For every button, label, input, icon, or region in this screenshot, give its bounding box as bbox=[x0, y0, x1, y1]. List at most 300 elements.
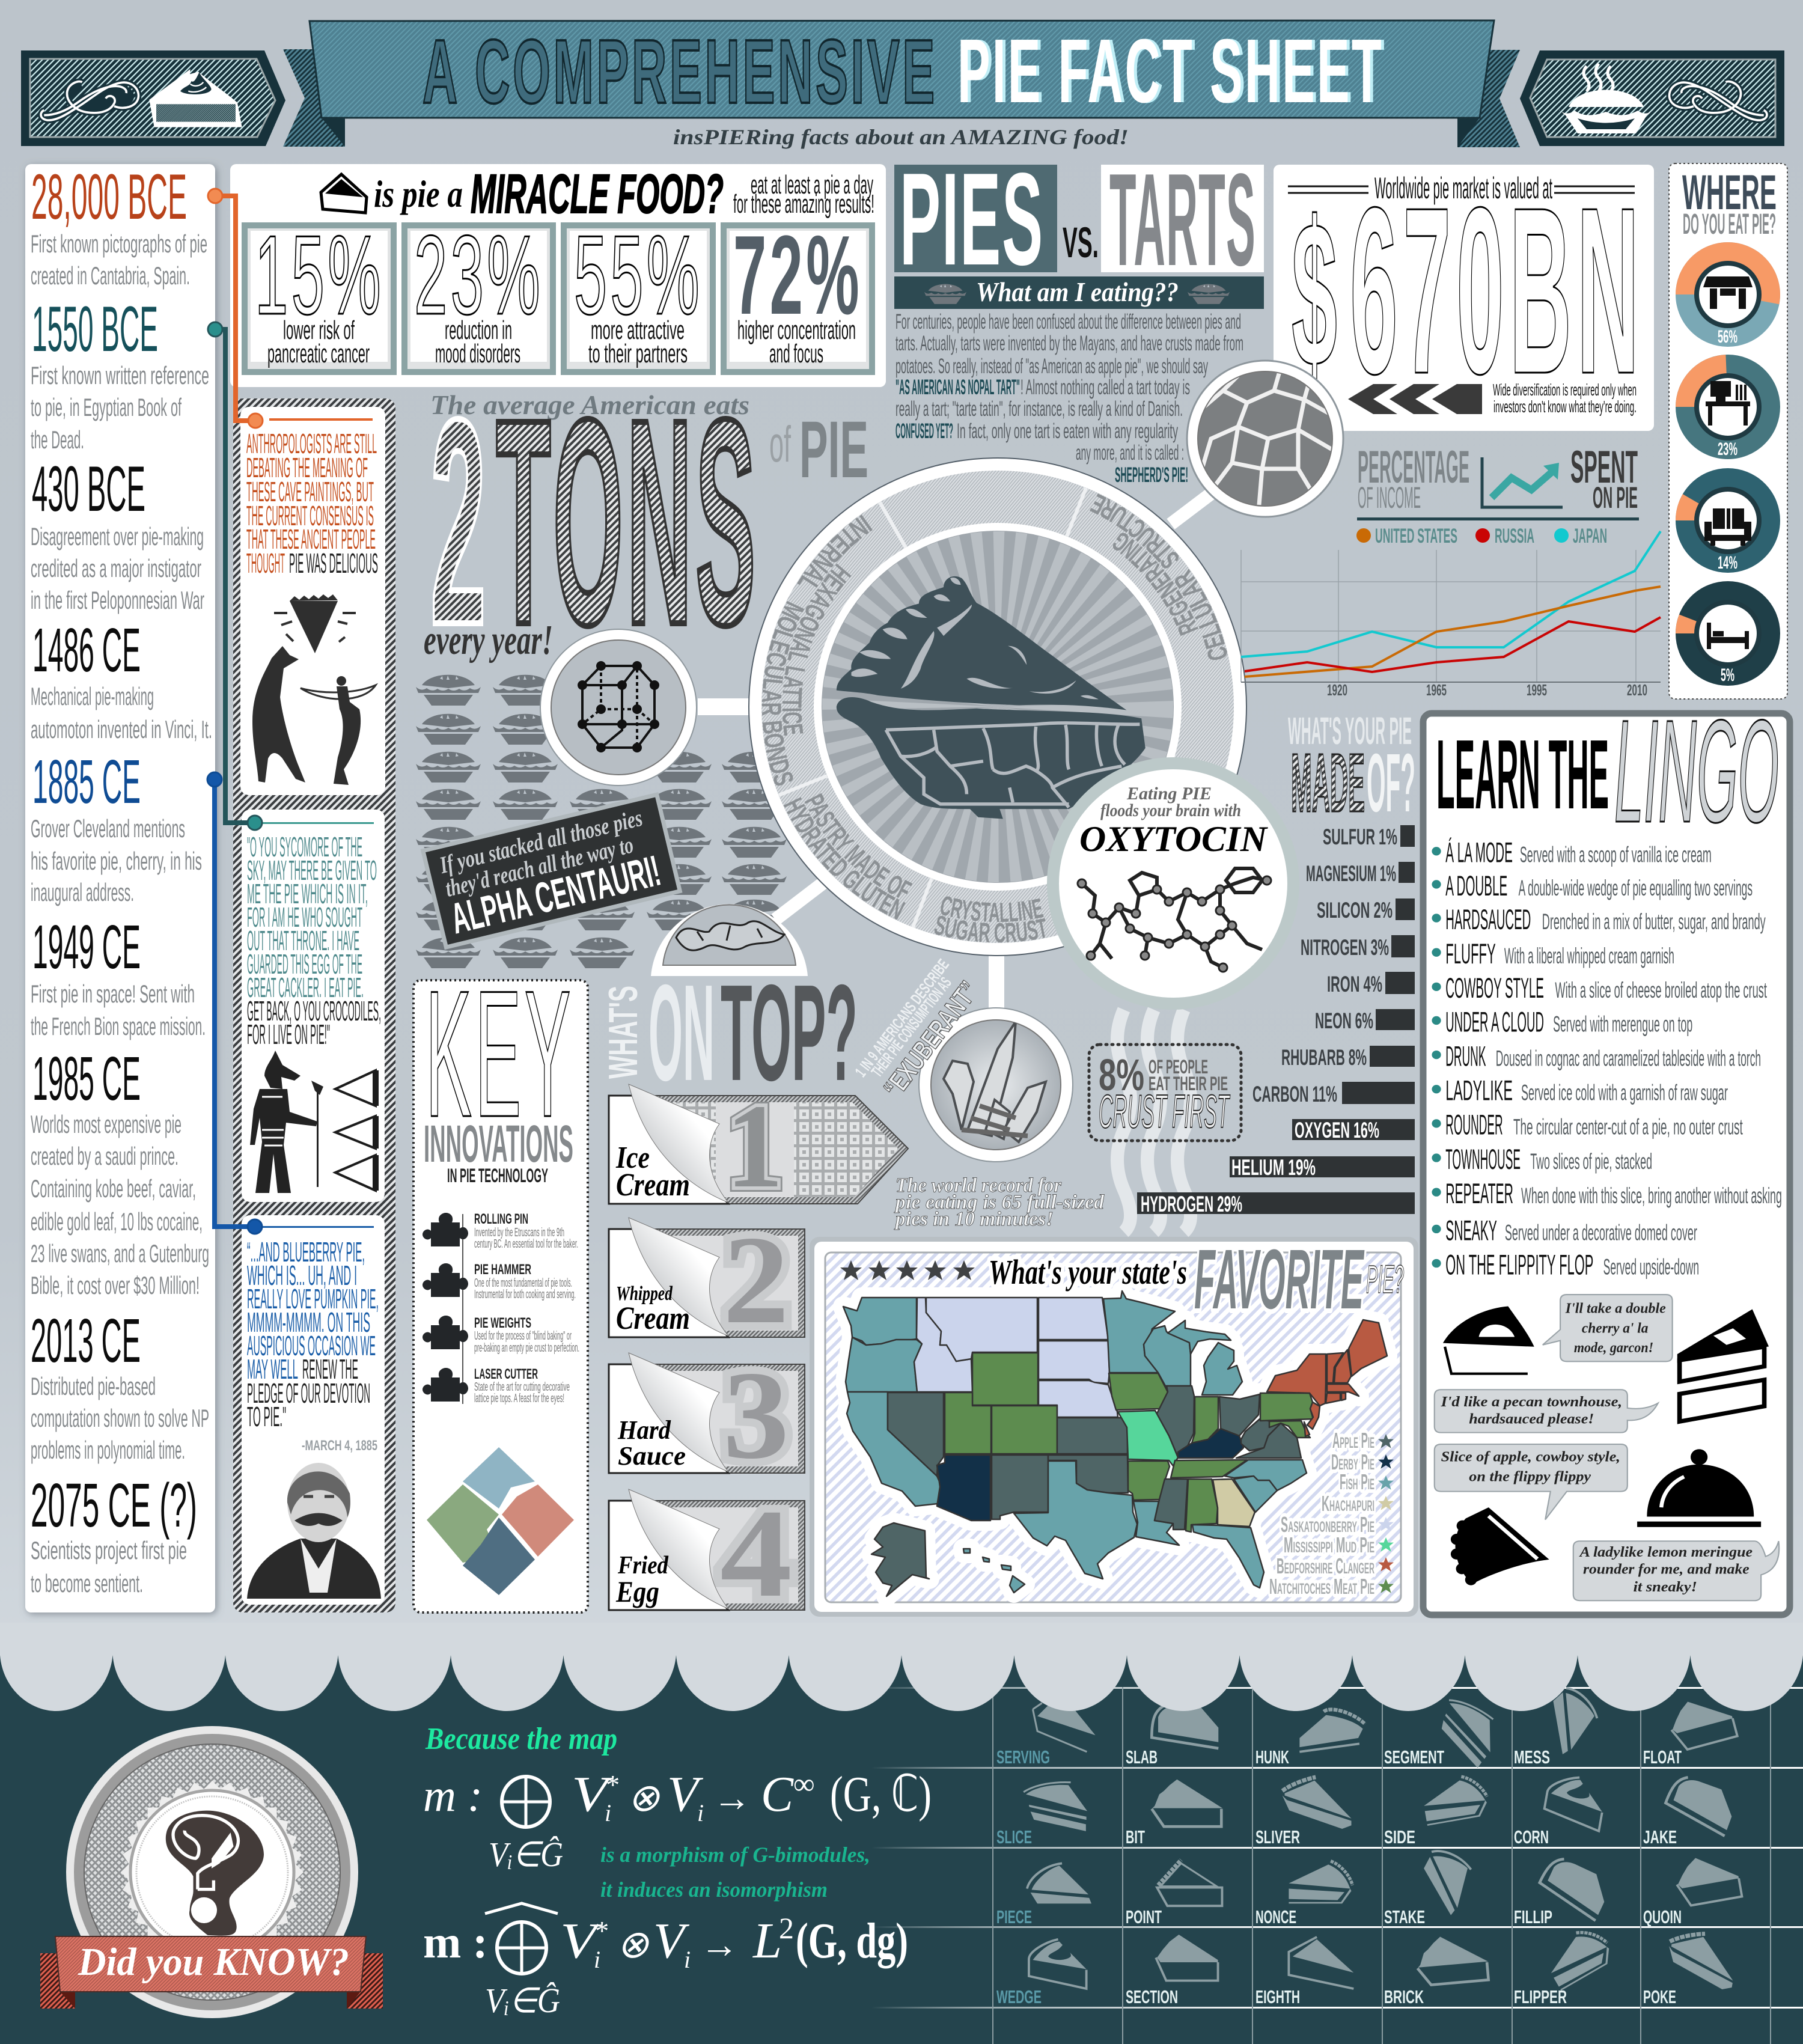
lingo glossary list: ROUNDER bbox=[1445, 1109, 1503, 1141]
text: CRUST FIRST bbox=[1099, 1085, 1230, 1138]
bar chart: pie composition: OXYGEN 16% bbox=[1295, 1118, 1379, 1143]
topping card 2: whipped cream bbox=[609, 1210, 805, 1350]
quote card: Grover Cleveland: MAY WELL bbox=[247, 1353, 298, 1385]
text block: pies vs tarts explanation: "AS AMERICAN AS NOPAL TART" bbox=[895, 376, 1020, 399]
slice labels: SEGMENT bbox=[1384, 1747, 1444, 1768]
line chart: spending over time: 2010 bbox=[1627, 681, 1647, 699]
callout: oxytocin: OXYTOCIN bbox=[1079, 819, 1269, 859]
speech bubble: lemon meringue: it sneaky! bbox=[1634, 1579, 1697, 1595]
formula line 1: V bbox=[667, 1766, 704, 1822]
ring text bbox=[762, 493, 1227, 942]
item: laser cutter: lattice pie tops. A feast for the eyes! bbox=[474, 1392, 564, 1405]
icon: pie slice bbox=[321, 174, 367, 213]
slice labels: FLIPPER bbox=[1514, 1986, 1567, 2007]
topping card 1: ice cream: 1 bbox=[726, 1080, 783, 1213]
speech bubble: pecan townhouse bbox=[1435, 1390, 1658, 1433]
slice labels: NONCE bbox=[1255, 1906, 1296, 1927]
text: TOP? bbox=[721, 957, 858, 1109]
math formula block: is a morphism of G-bimodules, bbox=[600, 1843, 870, 1867]
map legend: Saskatoonberry Pie bbox=[1281, 1512, 1374, 1537]
title: PIE FACT SHEET bbox=[960, 20, 1387, 121]
header: ribbon tails bbox=[283, 49, 1520, 147]
heading: what's your pie made of bbox=[1288, 709, 1415, 829]
timeline entry: 1985 CE: 1985 CE bbox=[32, 1044, 141, 1113]
text: ME THE PIE WHICH IS IN IT, bbox=[247, 878, 368, 909]
panel: key innovations: IN PIE TECHNOLOGY bbox=[447, 1165, 548, 1186]
timeline entry: 1949 CE: First pie in space! Sent with bbox=[31, 980, 195, 1008]
topping card 4: fried egg: 4 bbox=[720, 1484, 792, 1623]
text block: pies vs tarts explanation: In fact, only one tart is eaten with any regularity bbox=[957, 419, 1178, 443]
speech bubble: double cherry: mode, garcon! bbox=[1574, 1340, 1653, 1356]
topping card 1: ice cream: 1 bbox=[726, 1080, 783, 1213]
text: INNOVATIONS bbox=[424, 1115, 573, 1173]
formula line 2: Vᵢ∈Ĝ bbox=[485, 1981, 560, 2020]
timeline entry: 430 BCE: Disagreement over pie-making bbox=[31, 522, 204, 551]
map legend: Bedforshire Clanger bbox=[1277, 1554, 1374, 1578]
timeline entry: 430 BCE: credited as a major instigator bbox=[31, 554, 201, 582]
donut: table 56% bbox=[1686, 252, 1770, 347]
topping card 2: whipped cream: 2 bbox=[723, 1210, 789, 1350]
header: left badge with pie slice bbox=[21, 50, 285, 146]
formula line 1: ∞ bbox=[793, 1767, 815, 1801]
ribbon: did you know: Did you KNOW? bbox=[78, 1940, 349, 1984]
math formula block bbox=[423, 1722, 932, 2020]
text block: pies vs tarts explanation: SHEPHERD'S PIE! bbox=[1115, 463, 1188, 487]
timeline entry: 2013 CE: problems in polynomial time. bbox=[31, 1436, 185, 1464]
text: MMMM-MMMM. ON THIS bbox=[247, 1307, 370, 1338]
text: pre-baking an empty pie crust to perfection. bbox=[474, 1341, 579, 1355]
lingo glossary list: DRUNK bbox=[1445, 1041, 1486, 1072]
panel: favorite pie map bbox=[810, 1231, 1418, 1617]
formula line 2: V bbox=[560, 1913, 602, 1969]
text: TONS bbox=[496, 359, 759, 686]
banner: alpha centauri bbox=[423, 795, 680, 947]
donut: desk 23%: 23% bbox=[1718, 439, 1737, 459]
panel: miracle food: eat at least a pie a day bbox=[751, 170, 873, 200]
panel: timeline: 2075 CE (?) bbox=[31, 1471, 197, 1540]
bar chart: pie composition: MAGNESIUM 1% bbox=[1306, 861, 1396, 886]
magnifier: gluten half circle bbox=[651, 904, 808, 976]
formula line 2: * bbox=[594, 1915, 608, 1946]
banner: alpha centauri: ALPHA CENTAURI! bbox=[447, 847, 665, 943]
slice labels: BIT bbox=[1126, 1826, 1145, 1847]
text: THE CURRENT CONSENSUS IS bbox=[246, 500, 374, 531]
big number: 2 TONS bbox=[430, 359, 759, 686]
text block: pies vs tarts explanation bbox=[895, 310, 1243, 487]
formula line 1: i bbox=[697, 1799, 704, 1826]
stat: 72%: 72% bbox=[733, 212, 862, 338]
topping card 3: hard sauce: 3 bbox=[723, 1346, 789, 1485]
heading: what's on top: WHAT'S bbox=[600, 986, 646, 1079]
formula line 2: i bbox=[594, 1946, 600, 1973]
panel: favorite pie map: PIE? bbox=[1366, 1257, 1404, 1301]
panel: miracle food bbox=[230, 163, 886, 387]
lingo glossary list: Two slices of pie, stacked bbox=[1530, 1150, 1652, 1174]
formula line 1: C bbox=[761, 1766, 794, 1822]
item: pie weights: PIE WEIGHTS bbox=[474, 1315, 531, 1331]
formula line 1: → bbox=[713, 1777, 751, 1819]
donut: table 56%: 56% bbox=[1718, 327, 1737, 347]
item: laser cutter bbox=[423, 1366, 570, 1405]
icon: oxytocin molecule bbox=[1082, 868, 1267, 968]
text: For centuries, people have been confused about the difference between pies and bbox=[895, 310, 1241, 334]
bar chart: pie composition: SILICON 2% bbox=[1317, 898, 1393, 923]
timeline entry: 1550 BCE: to pie, in Egyptian Book of bbox=[31, 393, 182, 421]
icon: question mark bbox=[166, 1811, 264, 1936]
chart heading: percentage of income spent on pie: PERCENTAGE bbox=[1358, 442, 1469, 493]
caption: every year: every year! bbox=[424, 617, 553, 664]
lingo glossary list: ON THE FLIPPITY FLOP bbox=[1445, 1249, 1593, 1281]
speech bubble: double cherry bbox=[1543, 1295, 1673, 1361]
text: PIE WAS DELICIOUS bbox=[289, 548, 378, 579]
topping card 3: hard sauce: Hard bbox=[617, 1415, 671, 1445]
subtitle: insPIERing facts about an AMAZING food! bbox=[673, 125, 1129, 149]
map legend: Derby Pie bbox=[1331, 1450, 1374, 1474]
stat: 15%: lower risk of bbox=[283, 316, 355, 345]
slice labels: CORN bbox=[1514, 1826, 1549, 1847]
quote card: book of the dead: FOR I LIVE ON PIE!" bbox=[247, 1019, 330, 1050]
ring text: HYDRATED GLUTEN bbox=[784, 797, 906, 920]
text block: pies vs tarts explanation: CONFUSED YET? bbox=[895, 419, 953, 443]
panel: market value bbox=[1274, 157, 1654, 431]
timeline entry: 28,000 BCE bbox=[31, 160, 207, 290]
ring text: INTERNAL bbox=[797, 514, 873, 588]
footer: dark band bbox=[0, 1655, 1803, 2044]
map heading: What's your state's bbox=[989, 1252, 1187, 1292]
slice labels: FILLIP bbox=[1514, 1906, 1552, 1927]
formula line 1 bbox=[423, 1766, 932, 1874]
icon: cave painting of pie slice and figures bbox=[252, 594, 376, 785]
panel: key innovations: One of the most fundamental of pie tools. bbox=[474, 1277, 572, 1290]
stat: 72%: and focus bbox=[769, 339, 823, 368]
icon: stacked slices bbox=[1680, 1313, 1766, 1421]
footer: scalloped edge bbox=[0, 1623, 1803, 1711]
formula line 1: Vᵢ∈Ĝ bbox=[489, 1835, 563, 1874]
formula line 1: (G, ℂ) bbox=[830, 1766, 932, 1822]
slice labels: SERVING bbox=[996, 1747, 1050, 1768]
text block: pies vs tarts explanation: potatoes. So really, instead of "as American as apple pie", we should say bbox=[895, 355, 1208, 378]
text block: pies vs tarts explanation: ! Almost nothing called a tart today is bbox=[1020, 376, 1190, 399]
lingo glossary list: UNDER A CLOUD bbox=[1445, 1007, 1544, 1038]
slice labels: SLICE bbox=[996, 1826, 1032, 1847]
line chart: spending over time: 1965 bbox=[1426, 681, 1447, 699]
timeline entry: 1885 CE: his favorite pie, cherry, in his bbox=[31, 847, 202, 875]
bar chart: pie composition: NEON 6% bbox=[1315, 1008, 1373, 1033]
bar chart: pie composition: NITROGEN 3% bbox=[1301, 935, 1389, 960]
item: rolling pin: Invented by the Etruscans in the 9th bbox=[474, 1226, 564, 1239]
slice labels: SLAB bbox=[1126, 1747, 1158, 1768]
timeline entry: 28,000 BCE: First known pictographs of pie bbox=[31, 230, 207, 258]
timeline entry: 1486 CE bbox=[31, 615, 212, 743]
formula line 1: V bbox=[572, 1766, 614, 1822]
timeline entry: 1486 CE: automoton invented in Vinci, It. bbox=[31, 715, 212, 743]
text: REALLY LOVE PUMPKIN PIE, bbox=[247, 1283, 379, 1314]
item: rolling pin: ROLLING PIN bbox=[474, 1211, 528, 1227]
timeline entry: 1486 CE: 1486 CE bbox=[32, 615, 141, 685]
topping card 1: ice cream: Ice bbox=[615, 1141, 650, 1175]
ring text: CRYSTALLINE bbox=[941, 897, 1043, 922]
heading: is pie a miracle food: is pie a bbox=[374, 172, 463, 215]
text: OUT THAT THRONE. I HAVE bbox=[247, 925, 359, 956]
slice labels: SIDE bbox=[1384, 1826, 1415, 1847]
title: A COMPREHENSIVE bbox=[423, 20, 938, 122]
text block: pies vs tarts explanation: really a tart; "tarte tatin", for instance, is really a kind of Danish. bbox=[895, 397, 1183, 421]
stat: 55%: 55% bbox=[574, 212, 703, 338]
text: SKY, MAY THERE BE GIVEN TO bbox=[247, 855, 377, 886]
header: right badge with whole pie bbox=[1520, 50, 1784, 146]
panel: key innovations: State of the art for cutting decorative bbox=[474, 1380, 570, 1394]
callout: 8% crust first: 8% bbox=[1099, 1050, 1144, 1100]
timeline entry: 430 BCE: in the first Peloponnesian War bbox=[31, 586, 204, 614]
topping card 4: fried egg: 4 bbox=[720, 1484, 792, 1623]
quote card: Grover Cleveland: -MARCH 4, 1885 bbox=[302, 1438, 377, 1454]
map of United States bbox=[843, 1291, 1387, 1596]
quote card: Grover Cleveland: TO PIE." bbox=[247, 1401, 286, 1432]
formula line 1: i bbox=[605, 1799, 611, 1826]
math formula block: it induces an isomorphism bbox=[600, 1878, 828, 1902]
timeline entry: 28,000 BCE: 28,000 BCE bbox=[31, 160, 187, 233]
text: “...AND BLUEBERRY PIE, bbox=[247, 1236, 365, 1268]
stat: 55%: more attractive bbox=[591, 316, 685, 345]
callout: 8% crust first: EAT THEIR PIE bbox=[1149, 1073, 1228, 1094]
speech bubble: double cherry: cherry a' la bbox=[1582, 1320, 1649, 1336]
lingo glossary list: LADYLIKE bbox=[1445, 1075, 1513, 1106]
chart legend: RUSSIA bbox=[1495, 525, 1534, 548]
speech bubble: double cherry: I'll take a double bbox=[1565, 1300, 1666, 1316]
timeline entry: 28,000 BCE: created in Cantabria, Spain. bbox=[31, 261, 190, 290]
speech bubble: slice of apple: Slice of apple, cowboy style, bbox=[1441, 1448, 1620, 1465]
heading: pies vs tarts: VS. bbox=[1063, 219, 1099, 267]
slice icons bbox=[1024, 1684, 1742, 1991]
ring text: STRUCTURE bbox=[1090, 493, 1179, 569]
timeline entry: 1985 CE: edible gold leaf, 10 lbs cocaine, bbox=[31, 1207, 203, 1236]
item: pie weights bbox=[423, 1315, 579, 1355]
stat: 15% bbox=[245, 212, 394, 372]
quote card: anthropologists: THOUGHT bbox=[246, 548, 285, 579]
stat: 15%: 15% bbox=[255, 212, 384, 338]
text: TARTS bbox=[1109, 147, 1256, 293]
formula line 2: (G, dg) bbox=[796, 1913, 908, 1969]
donut: desk 23% bbox=[1686, 365, 1770, 459]
stat: 72%: higher concentration bbox=[737, 316, 856, 345]
slice labels: MESS bbox=[1514, 1747, 1550, 1768]
speech bubble: lemon meringue: rounder for me, and make bbox=[1583, 1561, 1750, 1577]
map legend: Khachapuri bbox=[1322, 1491, 1374, 1516]
chart legend: JAPAN bbox=[1573, 525, 1607, 548]
panel: key innovations: century BC. An essential tool for the baker. bbox=[474, 1237, 578, 1251]
text: DEBATING THE MEANING OF bbox=[246, 452, 368, 483]
map legend: Fish Pie bbox=[1340, 1469, 1374, 1494]
slice labels: JAKE bbox=[1643, 1826, 1677, 1847]
stat: 23%: mood disorders bbox=[435, 339, 520, 368]
bar chart: pie composition: CARBON 11% bbox=[1252, 1082, 1337, 1106]
timeline entry: 430 BCE: 430 BCE bbox=[32, 453, 145, 525]
slice labels: SLIVER bbox=[1255, 1826, 1300, 1847]
icon: pie a la mode bbox=[1443, 1306, 1534, 1374]
donut: sofa 14% bbox=[1686, 478, 1770, 573]
topping card 1: ice cream: 1 bbox=[726, 1080, 783, 1213]
badge: did you know bbox=[40, 1726, 383, 2018]
map heading: FAVORITE bbox=[1194, 1231, 1365, 1326]
panel: key innovations: Instrumental for both cooking and serving. bbox=[474, 1288, 576, 1301]
stat: 55% bbox=[564, 212, 713, 372]
text: SPENT bbox=[1570, 442, 1638, 493]
quote card: anthropologists bbox=[240, 407, 385, 795]
panel: hatched quote column bbox=[233, 398, 395, 1612]
stars bbox=[840, 1260, 975, 1280]
stat: 23% bbox=[404, 212, 553, 372]
stat: 23%: reduction in bbox=[445, 316, 512, 345]
portrait: Grover Cleveland bbox=[247, 1463, 381, 1599]
timeline entry: 1885 CE: inaugural address. bbox=[31, 878, 134, 906]
connectors to centre ring bbox=[698, 494, 1210, 1010]
heading: what's your pie made of: MADE bbox=[1291, 737, 1365, 829]
magnifier: crust texture bbox=[1187, 361, 1343, 517]
topping card 2: whipped cream: Whipped bbox=[616, 1283, 673, 1305]
lingo glossary list: TOWNHOUSE bbox=[1445, 1144, 1521, 1176]
timeline entry: 1985 CE: Worlds most expensive pie bbox=[31, 1110, 182, 1138]
timeline entry: 1885 CE: Grover Cleveland mentions bbox=[31, 814, 185, 843]
caption: world record bbox=[894, 1174, 1105, 1230]
map heading bbox=[989, 1231, 1404, 1326]
timeline entry: 2075 CE: Scientists project first pie bbox=[31, 1536, 187, 1564]
speech bubble: lemon meringue: A ladylike lemon meringue bbox=[1579, 1543, 1753, 1560]
lingo glossary list: SNEAKY bbox=[1445, 1215, 1497, 1246]
title: PIE FACT SHEET bbox=[957, 20, 1384, 121]
slice labels: POKE bbox=[1643, 1986, 1676, 2007]
item: rolling pin bbox=[423, 1211, 578, 1251]
formula line 2: i bbox=[684, 1946, 691, 1973]
lingo glossary list: HARDSAUCED bbox=[1445, 904, 1531, 936]
slice labels: STAKE bbox=[1384, 1906, 1425, 1927]
chart heading: percentage of income spent on pie bbox=[1357, 442, 1639, 520]
lingo glossary list bbox=[1432, 837, 1782, 1281]
bar chart: pie composition bbox=[1137, 825, 1415, 1216]
slice labels bbox=[996, 1747, 1682, 2007]
panel: timeline bbox=[25, 160, 215, 1612]
callout: exuberant bbox=[852, 956, 984, 1103]
item: pie hammer bbox=[423, 1261, 576, 1301]
text: ON PIE bbox=[1593, 481, 1638, 514]
item: laser cutter: LASER CUTTER bbox=[474, 1366, 538, 1382]
heading: of pie: of bbox=[769, 416, 791, 472]
panel: learn the lingo bbox=[1423, 690, 1790, 1615]
formula line 1: * bbox=[605, 1769, 618, 1800]
panel: where do you eat pie bbox=[1669, 163, 1787, 699]
bar chart: pie composition: RHUBARB 8% bbox=[1281, 1045, 1367, 1070]
speech bubble: slice of apple bbox=[1435, 1444, 1628, 1520]
timeline entry: 1985 CE bbox=[31, 1044, 209, 1299]
stat: 55%: to their partners bbox=[588, 339, 688, 368]
panel: key innovations bbox=[413, 953, 588, 1612]
donut: bed 5% bbox=[1686, 591, 1770, 685]
text: OF? bbox=[1367, 737, 1415, 829]
bar chart: pie composition: HYDROGEN 29% bbox=[1141, 1192, 1242, 1216]
footer: pie slice terminology grid bbox=[871, 1684, 1803, 2044]
text: RENEW THE bbox=[302, 1353, 358, 1385]
callout: oxytocin: Eating PIE bbox=[1126, 784, 1212, 804]
timeline entry: 2013 CE: Distributed pie-based bbox=[31, 1372, 156, 1400]
line chart: spending over time: 1995 bbox=[1527, 681, 1547, 699]
stat: 23%: 23% bbox=[414, 212, 543, 338]
donut: bed 5%: 5% bbox=[1721, 665, 1734, 685]
callout: oxytocin bbox=[1047, 757, 1299, 1010]
icon: giant pie slice bbox=[837, 576, 1146, 819]
ring section dividers bbox=[779, 488, 1086, 927]
topping card 3: hard sauce: 3 bbox=[723, 1346, 789, 1485]
text: THAT THESE ANCIENT PEOPLE bbox=[246, 523, 376, 555]
text: GREAT CACKLER. I EAT PIE. bbox=[247, 972, 364, 1003]
text: WHAT'S YOUR PIE bbox=[1288, 709, 1412, 752]
heading: is pie a miracle food: MIRACLE FOOD? bbox=[471, 163, 724, 225]
lingo glossary list: FLUFFY bbox=[1445, 938, 1496, 970]
slice labels: POINT bbox=[1126, 1906, 1162, 1927]
timeline entry: 1550 BCE: 1550 BCE bbox=[32, 293, 158, 365]
callout: exuberant: THEIR PIE CONSUMPTION AS bbox=[868, 974, 955, 1081]
text: ANTHROPOLOGISTS ARE STILL bbox=[246, 428, 377, 459]
timeline entry: 2013 CE: 2013 CE bbox=[31, 1306, 141, 1375]
ring text: SUGAR CRUST bbox=[934, 916, 1046, 942]
text: KEY bbox=[426, 953, 574, 1155]
topping card 2: whipped cream: 2 bbox=[723, 1210, 789, 1350]
chart heading: percentage of income spent on pie: OF INCOME bbox=[1358, 481, 1421, 514]
icon: puzzle pieces bbox=[427, 1447, 574, 1595]
lingo heading bbox=[1436, 690, 1779, 853]
formula line 2: ⊗ bbox=[617, 1923, 649, 1966]
callout: 8% crust first bbox=[1089, 1045, 1241, 1141]
stat: 72% bbox=[724, 212, 872, 372]
text: WHICH IS... UH, AND I bbox=[247, 1260, 357, 1291]
lingo glossary list: REPEATER bbox=[1445, 1178, 1513, 1210]
speech bubble: pecan townhouse: I'd like a pecan townhouse, bbox=[1441, 1393, 1622, 1410]
timeline entry: 1985 CE: 23 live swans, and a Gutenburg bbox=[31, 1239, 209, 1268]
callout: 8% crust first: OF PEOPLE bbox=[1149, 1056, 1208, 1078]
speech bubble: lemon meringue bbox=[1573, 1541, 1779, 1600]
formula line 2: m : bbox=[423, 1917, 488, 1968]
formula line 2: L bbox=[752, 1913, 782, 1969]
text: AUSPICIOUS OCCASION WE bbox=[247, 1330, 376, 1361]
icon: Anubis figure bbox=[250, 1051, 323, 1193]
timeline entry: 2013 CE: computation shown to solve NP bbox=[31, 1404, 209, 1432]
panel: miracle food: for these amazing results! bbox=[733, 189, 874, 219]
text: FOR I AM HE WHO SOUGHT bbox=[247, 901, 362, 933]
slice labels: HUNK bbox=[1255, 1747, 1289, 1768]
chart legend bbox=[1356, 525, 1607, 548]
text: GUARDED THIS EGG OF THE bbox=[247, 948, 362, 980]
banner: alpha centauri: they'd reach all the way to bbox=[442, 831, 636, 902]
decorative wavy stripes bbox=[1117, 1010, 1191, 1232]
lingo glossary list: Á LA MODE bbox=[1445, 837, 1513, 868]
line chart: spending over time: 1920 bbox=[1327, 681, 1347, 699]
bar chart: pie composition: IRON 4% bbox=[1327, 972, 1382, 996]
topping card 3: hard sauce: Sauce bbox=[618, 1441, 686, 1471]
icon: cloche bbox=[1637, 1449, 1761, 1527]
pie grid: stack of pies bbox=[416, 675, 787, 968]
formula line 1: m : bbox=[423, 1771, 483, 1821]
panel: key innovations: Used for the process of "blind baking" or bbox=[474, 1329, 572, 1343]
ring text: PASTRY MADE OF bbox=[804, 793, 912, 898]
slice labels: EIGHTH bbox=[1255, 1986, 1300, 2007]
ring text: REGENERATING bbox=[1113, 532, 1198, 636]
topping card 1: ice cream bbox=[609, 1080, 908, 1213]
text: PLEDGE OF OUR DEVOTION bbox=[247, 1377, 370, 1409]
heading: of pie bbox=[769, 405, 868, 495]
icon: rounder slice bbox=[1451, 1507, 1549, 1585]
quote card: Grover Cleveland bbox=[242, 1215, 385, 1605]
text: tarts. Actually, tarts were invented by the Mayans, and have crusts made from bbox=[895, 332, 1243, 355]
quote card: book of the dead bbox=[242, 810, 385, 1202]
heading: of pie: PIE bbox=[799, 405, 868, 495]
